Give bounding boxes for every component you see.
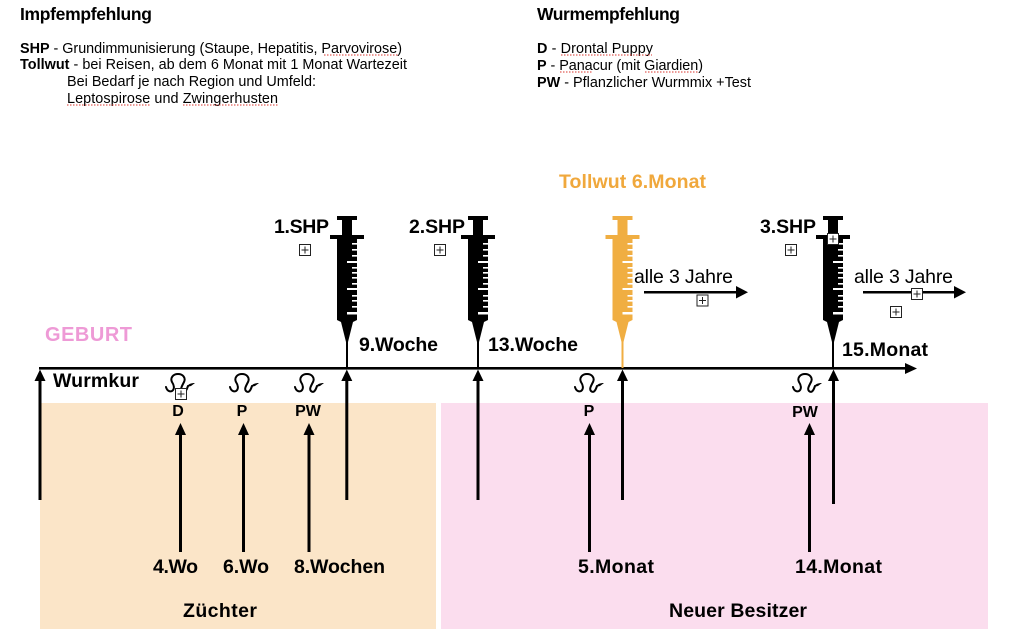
booster: alle 3 Jahre (SHP): [854, 266, 966, 298]
labels: deworming dates: 6.Wo: [223, 556, 269, 578]
labels: deworming product: PW: [295, 403, 322, 420]
labels: vaccination names: 1.SHP: [274, 216, 329, 238]
labels: deworming product: D: [172, 403, 184, 420]
text block: Wurmempfehlung details: P - Panacur (mit Giardien): [537, 58, 703, 74]
labels: deworming dates: [153, 556, 882, 578]
labels: deworming dates: 5.Monat: [578, 556, 654, 578]
syringe: Tollwut: [606, 216, 640, 368]
text block: Impfempfehlung details: Leptospirose und Zwingerhusten: [67, 91, 278, 107]
label: Wurmkur: Wurmkur: [53, 370, 139, 392]
label: Züchter: Züchter: [183, 600, 257, 622]
text block: Impfempfehlung details: [20, 41, 407, 107]
icons: worms: [166, 374, 822, 392]
panel: Züchter background: [40, 403, 436, 629]
panel: Neuer Besitzer background: [441, 403, 988, 629]
heading: Wurmempfehlung: Wurmempfehlung: [537, 4, 680, 24]
text block: Wurmempfehlung details: D - Drontal Puppy: [537, 41, 654, 57]
text block: Impfempfehlung details: SHP - Grundimmunisierung (Staupe, Hepatitis, Parvovirose): [20, 41, 402, 57]
booster: alle 3 Jahre (Tollwut): alle 3 Jahre: [634, 266, 733, 288]
labels: deworming product: P: [237, 403, 248, 420]
icons: plus boxes: [176, 234, 922, 400]
booster: alle 3 Jahre (SHP): alle 3 Jahre: [854, 266, 953, 288]
booster: alle 3 Jahre (Tollwut): [634, 266, 748, 298]
text block: Impfempfehlung details: Tollwut - bei Reisen, ab dem 6 Monat mit 1 Monat Wartezeit: [20, 57, 407, 73]
upward arrows for deworming dates: [175, 423, 815, 552]
heading: Tollwut 6.Monat: Tollwut 6.Monat: [559, 171, 706, 193]
labels: vaccination names: 2.SHP: [409, 216, 465, 238]
labels: vaccination dates: 9.Woche: [359, 334, 438, 356]
labels: vaccination names: 3.SHP: [760, 216, 816, 238]
labels: deworming product: P: [584, 403, 595, 420]
text block: Wurmempfehlung details: [537, 41, 751, 91]
syringe: 2.SHP: [461, 216, 495, 368]
text block: Impfempfehlung details: Bei Bedarf je nach Region und Umfeld:: [67, 74, 316, 90]
label: Neuer Besitzer: Neuer Besitzer: [669, 600, 807, 622]
labels: deworming dates: 4.Wo: [153, 556, 198, 578]
syringe: 1.SHP: [330, 216, 364, 368]
heading: Impfempfehlung: Impfempfehlung: [20, 4, 152, 24]
labels: vaccination dates: 15.Monat: [842, 339, 928, 361]
labels: deworming product: PW: [792, 404, 819, 421]
labels: deworming dates: 8.Wochen: [294, 556, 385, 578]
labels: vaccination names: [274, 216, 816, 238]
labels: deworming product: [172, 403, 819, 421]
label: GEBURT: GEBURT: [45, 324, 132, 346]
text block: Wurmempfehlung details: PW - Pflanzlicher Wurmmix +Test: [537, 75, 751, 91]
upward arrows from the panels to the axis: [34, 370, 839, 504]
labels: deworming dates: 14.Monat: [795, 556, 882, 578]
labels: vaccination dates: 13.Woche: [488, 334, 578, 356]
labels: vaccination dates: [359, 334, 928, 361]
syringe: 3.SHP: [816, 216, 850, 368]
timeline axis arrow: [39, 363, 917, 374]
